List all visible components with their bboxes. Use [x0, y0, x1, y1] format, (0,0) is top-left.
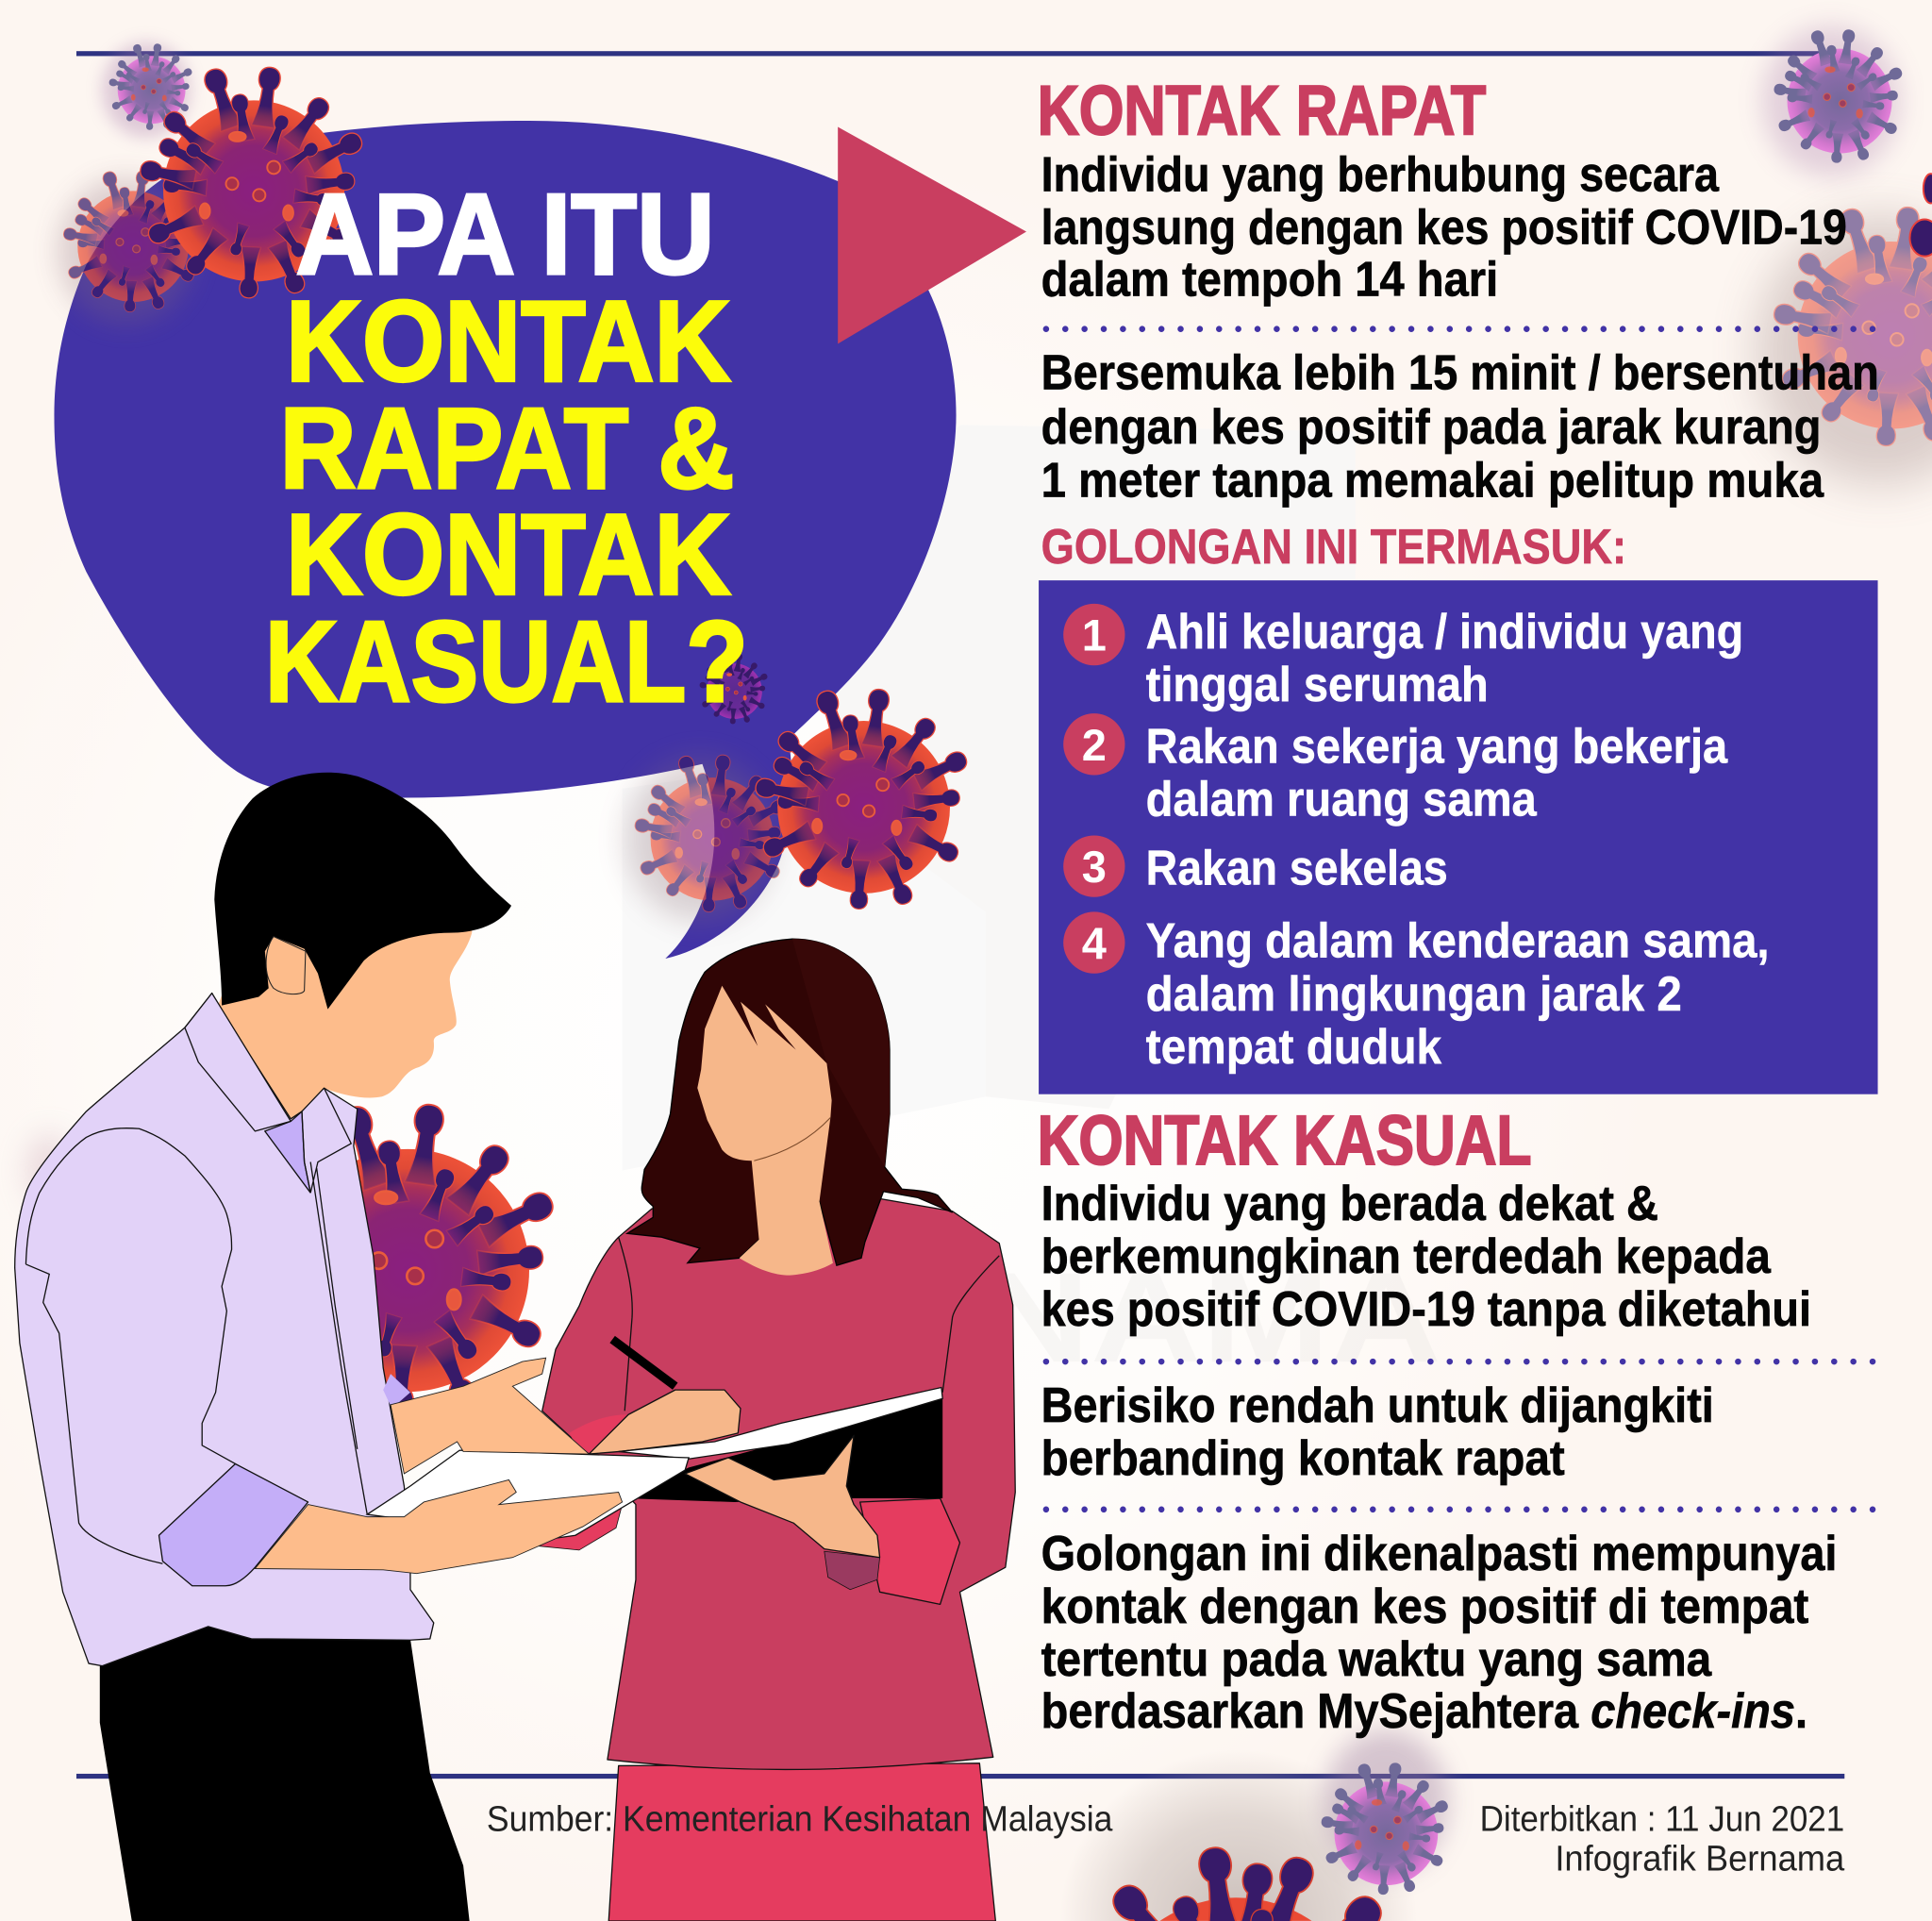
subheading: GOLONGAN INI TERMASUK:	[1041, 520, 1626, 575]
text: low risk	[1041, 1378, 1714, 1486]
item 2	[1063, 713, 1728, 827]
item 2: dalam ruang sama	[1146, 773, 1538, 827]
text: kasual definition: kes positif COVID-19 tanpa diketahui	[1041, 1282, 1811, 1337]
hand: woman holding folder	[685, 1435, 880, 1558]
item 1: Ahli keluarga / individu yang	[1146, 605, 1743, 660]
item 1: tinggal serumah	[1146, 658, 1489, 712]
neck	[740, 1118, 833, 1276]
heading: kontak rapat: KONTAK RAPAT	[1038, 71, 1486, 149]
item 2: 2	[1082, 720, 1107, 770]
item 4: tempat duduk	[1146, 1020, 1442, 1075]
ear	[266, 937, 306, 994]
virus: top right pale	[1762, 25, 1904, 176]
item 2: Rakan sekerja yang bekerja	[1146, 719, 1728, 774]
title: KASUAL?	[265, 597, 748, 726]
cuff shadow	[824, 1551, 880, 1590]
text: low risk: Berisiko rendah untuk dijangkiti	[1041, 1378, 1714, 1433]
right cuff	[860, 1498, 959, 1604]
text: definition 2: dengan kes positif pada jarak kurang	[1041, 400, 1821, 455]
text: definition 1: dalam tempoh 14 hari	[1041, 252, 1498, 307]
text: kasual definition	[1041, 1177, 1811, 1337]
title: RAPAT &	[279, 384, 734, 512]
skirt	[608, 1763, 995, 1921]
virus: bottom red, cropped	[1107, 1846, 1389, 1921]
title: KONTAK	[286, 277, 731, 406]
upper page	[619, 1388, 942, 1459]
text: low risk: berbanding kontak rapat	[1041, 1431, 1565, 1486]
virus: big red near tail	[754, 688, 970, 910]
publication credit: Infografik Bernama	[1555, 1839, 1845, 1879]
top rule	[76, 51, 1844, 56]
sleeve seams	[619, 1237, 999, 1411]
text: definition 1	[1041, 147, 1847, 307]
virus: big red top left	[139, 66, 365, 298]
hair highlight	[792, 939, 890, 1167]
item 1	[1063, 604, 1743, 712]
collar inner	[265, 1111, 310, 1193]
text: definition 1: Individu yang berhubung secara	[1041, 147, 1720, 202]
item 3	[1063, 835, 1448, 897]
face	[697, 986, 832, 1161]
collar	[185, 994, 291, 1131]
pink cuff under book	[530, 1505, 623, 1550]
illustration: woman	[530, 939, 1015, 1921]
trousers	[100, 1627, 470, 1921]
item 1: 1	[1082, 610, 1107, 660]
illustration: open folder	[367, 1388, 942, 1539]
hand: man upper forearm	[391, 1358, 589, 1474]
hair	[214, 773, 511, 1010]
virus: dark spike tips at right edge	[1909, 174, 1932, 257]
lower pages	[367, 1450, 689, 1539]
virus: tiny pale top left	[102, 42, 193, 138]
virus: halo at bottom	[1059, 1749, 1417, 1921]
folder cover	[625, 1398, 942, 1502]
speech bubble	[54, 121, 957, 959]
publication credit: Diterbitkan : 11 Jun 2021	[1480, 1800, 1844, 1840]
virus: behind man	[254, 1103, 558, 1414]
publication credit	[1480, 1800, 1845, 1879]
virus: pale near tail	[626, 754, 788, 921]
virus: bottom pink	[1321, 1730, 1450, 1895]
sleeve seam	[25, 1128, 235, 1563]
text: identification: Golongan ini dikenalpasti mempunyai	[1041, 1527, 1837, 1581]
text: kasual definition: berkemungkinan terdedah kepada	[1041, 1229, 1772, 1284]
watermark	[623, 426, 1441, 1389]
hair	[627, 939, 953, 1265]
rolled cuff	[158, 1463, 308, 1586]
item 4: dalam lingkungan jarak 2	[1146, 967, 1682, 1022]
arrow triangle	[838, 127, 1026, 343]
item 3: 3	[1082, 842, 1107, 892]
placket	[302, 1088, 367, 1514]
face and neck	[218, 911, 472, 1171]
text: definition 1: langsung dengan kes positif COVID-19	[1041, 201, 1847, 256]
text: definition 2: 1 meter tanpa memakai pelitup muka	[1041, 453, 1824, 508]
virus: small purple on bubble	[699, 653, 769, 725]
text: identification: tertentu pada waktu yang sama	[1041, 1632, 1712, 1687]
text: kasual definition: Individu yang berada dekat &	[1041, 1177, 1658, 1231]
heading: kontak kasual: KONTAK KASUAL	[1038, 1101, 1532, 1179]
writing hand	[589, 1390, 741, 1454]
text: identification: kontak dengan kes positif di tempat	[1041, 1579, 1808, 1634]
text: identification: berdasarkan MySejahtera check-ins.	[1041, 1684, 1807, 1739]
blouse	[542, 1183, 1015, 1769]
jaw line	[754, 1118, 830, 1161]
shirt	[15, 994, 434, 1666]
panel: numbered list	[1039, 580, 1878, 1094]
illustration: man	[15, 773, 511, 1921]
item 4	[1063, 911, 1770, 1075]
text: identification	[1041, 1527, 1837, 1739]
text: definition 2	[1041, 346, 1879, 508]
virus: right pale large	[1757, 206, 1932, 485]
bottom rule	[76, 1774, 1844, 1779]
title: APA ITU	[295, 170, 715, 298]
pen	[612, 1340, 675, 1386]
item 3: Rakan sekelas	[1146, 842, 1448, 896]
source: Sumber: Kementerian Kesihatan Malaysia	[487, 1800, 1113, 1840]
shoulder halo	[27, 1133, 72, 1208]
title	[265, 170, 748, 726]
hand: man lower forearm	[255, 1479, 623, 1574]
virus: pale red, left of bubble	[58, 170, 202, 324]
item 4: 4	[1082, 918, 1107, 968]
watermark: BERNAMA	[653, 1245, 1441, 1389]
cuff far hand	[569, 1414, 641, 1454]
title: KONTAK	[286, 490, 731, 618]
purple upper cuff	[383, 1374, 410, 1409]
item 4: Yang dalam kenderaan sama,	[1146, 914, 1770, 969]
